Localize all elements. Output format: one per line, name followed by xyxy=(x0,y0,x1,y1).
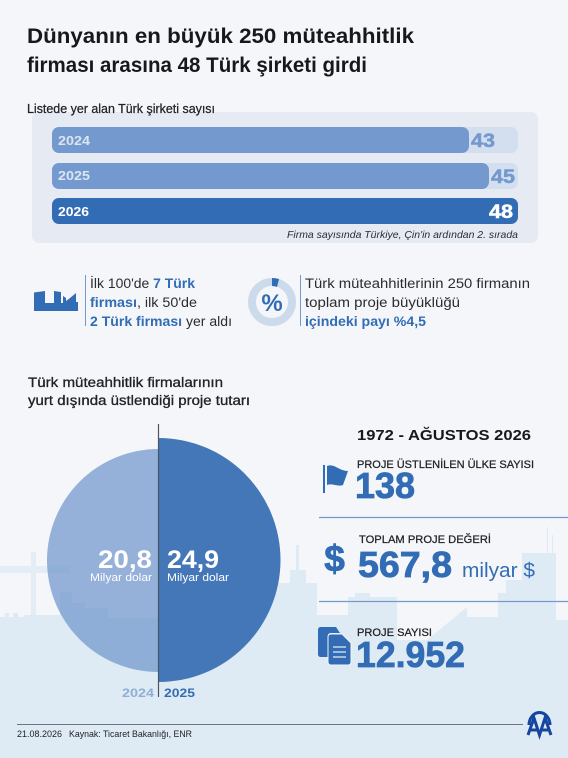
icon: percent donut xyxy=(252,278,292,322)
bar: 2025: 45 xyxy=(491,167,515,188)
title xyxy=(27,24,414,77)
bar: 2026: 48 xyxy=(489,202,513,223)
stat text xyxy=(90,276,232,329)
value 2024: Milyar dolar xyxy=(90,572,152,584)
icon: city xyxy=(34,291,78,311)
stat: countries xyxy=(323,458,534,506)
stat text: 2 Türk firması yer aldı xyxy=(90,314,232,329)
stat text: Türk müteahhitlerinin 250 firmanın xyxy=(305,276,530,291)
heading: period: 1972 - AĞUSTOS 2026 xyxy=(357,426,531,444)
stat text: İlk 100'de 7 Türk xyxy=(90,276,196,291)
subheading: Listede yer alan Türk şirketi sayısı xyxy=(27,101,215,116)
title: Dünyanın en büyük 250 müteahhitlik xyxy=(27,24,414,48)
bar: 2026: 2026 xyxy=(58,204,89,219)
date and source xyxy=(17,729,192,740)
title: firması arasına 48 Türk şirketi girdi xyxy=(27,53,367,77)
year labels: 2024 xyxy=(122,686,154,700)
heading: project value: yurt dışında üstlendiği proje tutarı xyxy=(28,393,250,408)
footer xyxy=(17,712,551,740)
note: Firma sayısında Türkiye, Çin'in ardından 2. sırada xyxy=(287,229,518,241)
stat: total value: TOPLAM PROJE DEĞERİ xyxy=(359,533,491,546)
bar: 2026 xyxy=(52,198,518,224)
stat: total value: 567,8 xyxy=(358,544,452,585)
year labels: 2025 xyxy=(164,686,195,700)
stat: total value: milyar $ xyxy=(462,560,535,582)
background skyline xyxy=(0,527,568,758)
stat: countries: PROJE ÜSTLENİLEN ÜLKE SAYISI xyxy=(357,458,534,471)
value 2025: 24,9 xyxy=(167,546,219,574)
stat: project count: 12.952 xyxy=(356,634,465,675)
panel background xyxy=(32,112,538,243)
icon: AA logo xyxy=(528,712,551,735)
bar: 2025: 2025 xyxy=(58,168,90,183)
stat text: toplam proje büyüklüğü xyxy=(305,295,460,310)
bar: 2024: 43 xyxy=(471,131,495,152)
value 2024 xyxy=(90,546,152,584)
year labels xyxy=(122,686,195,700)
heading: project value: Türk müteahhitlik firmalarının xyxy=(28,375,223,390)
half circle 2024 xyxy=(47,449,158,672)
value 2025 xyxy=(167,546,229,584)
stat text: firması, ilk 50'de xyxy=(90,295,197,310)
stat: total value xyxy=(324,533,535,585)
bar: 2024 xyxy=(52,127,518,153)
heading: project value xyxy=(28,375,250,408)
icon: dollar: $ xyxy=(324,538,345,579)
stat text xyxy=(305,276,530,329)
panel: Turkish company count xyxy=(27,101,538,243)
date and source: Kaynak: Ticaret Bakanlığı, ENR xyxy=(69,729,192,740)
chart: semicircle comparison xyxy=(47,424,280,700)
stat: top 100 xyxy=(34,275,232,329)
value 2024: 20,8 xyxy=(98,546,152,574)
bar: 2025 xyxy=(52,163,518,189)
stat: countries: 138 xyxy=(355,465,415,506)
icon: flag xyxy=(323,465,348,493)
icon: percent donut: % xyxy=(261,290,283,317)
stat: project count: PROJE SAYISI xyxy=(357,627,432,639)
stat: share xyxy=(252,275,530,329)
icon: documents xyxy=(318,627,351,665)
half circle 2025 xyxy=(158,438,280,682)
bar: 2024: 2024 xyxy=(58,133,91,148)
stat text: içindeki payı %4,5 xyxy=(305,314,427,329)
date and source: 21.08.2026 xyxy=(17,729,62,740)
value 2025: Milyar dolar xyxy=(167,572,229,584)
stat: project count xyxy=(318,627,465,675)
